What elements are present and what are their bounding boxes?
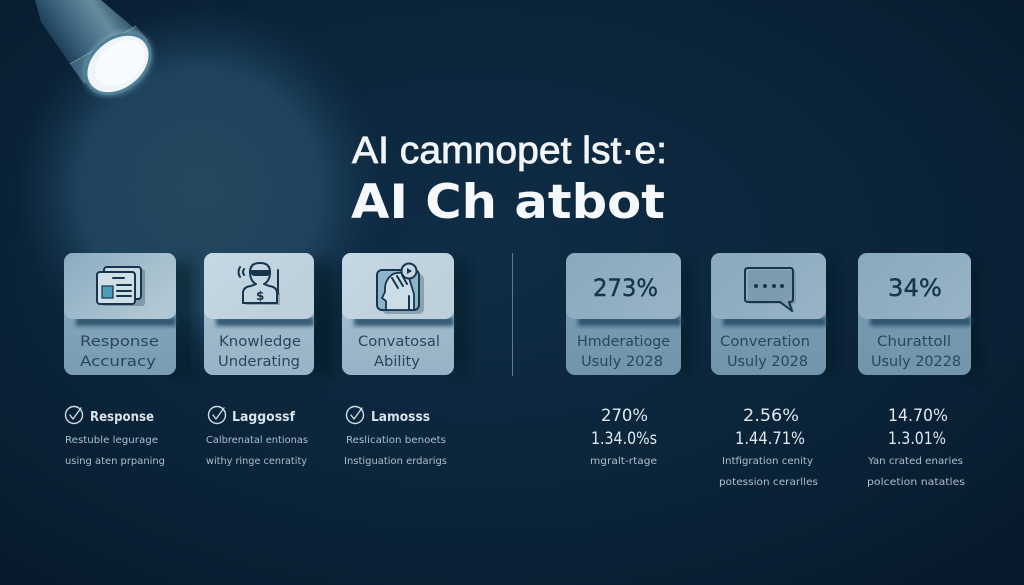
label: Usuly 20228 bbox=[871, 354, 961, 370]
text block: lamosss: Instiguation erdarigs bbox=[344, 456, 447, 467]
panel: conversation card bbox=[711, 253, 838, 375]
label: Accuracy bbox=[80, 354, 156, 370]
text block: lamosss: Lamosss bbox=[371, 410, 430, 425]
label: Underating bbox=[218, 354, 300, 370]
metric: 273% bbox=[593, 274, 658, 302]
text block: laggossf bbox=[206, 406, 308, 467]
text block: response bbox=[65, 406, 165, 467]
text block: laggossf: withy ringe cenratity bbox=[206, 456, 307, 467]
metric: 34% bbox=[888, 274, 942, 302]
text block: laggossf: Laggossf bbox=[232, 410, 295, 425]
label: Convatosal bbox=[358, 334, 440, 350]
stats block: 2.56%: potession cerarlles bbox=[719, 477, 818, 488]
label: Response bbox=[80, 334, 159, 350]
icon: check circle bbox=[66, 406, 82, 424]
panel: knowledge understanding card bbox=[204, 253, 332, 375]
text block: response: Response bbox=[90, 410, 154, 425]
text block: lamosss bbox=[344, 406, 447, 467]
title line 2: AI Ch atbot bbox=[351, 175, 665, 230]
label bbox=[80, 334, 159, 370]
stats block: 2.56% bbox=[719, 406, 818, 488]
stats block: 14.70% bbox=[867, 406, 965, 488]
text block: response: using aten prpaning bbox=[65, 456, 165, 467]
label: Usuly 2028 bbox=[581, 354, 663, 370]
stats block: 2.56%: 2.56% bbox=[743, 406, 799, 426]
title bbox=[351, 130, 667, 230]
icon: check circle bbox=[208, 406, 226, 424]
label bbox=[720, 334, 810, 370]
text block: laggossf: Calbrenatal entionas bbox=[206, 435, 308, 446]
label: Hmderatioge bbox=[577, 334, 670, 350]
stats block: 270%: mgralt-rtage bbox=[590, 456, 657, 467]
stats block: 14.70%: 14.70% bbox=[888, 406, 948, 426]
panel: conversational ability card bbox=[342, 253, 468, 375]
stats block: 270%: 270% bbox=[601, 406, 648, 426]
icon: agent with headset: $ bbox=[256, 289, 264, 303]
panel: 273% card bbox=[566, 253, 693, 375]
stats block: 14.70%: polcetion natatles bbox=[867, 477, 965, 488]
label: Churattoll bbox=[877, 334, 951, 350]
stats block: 2.56%: Intfigration cenity bbox=[722, 456, 813, 467]
title line 1: AI camnopet lst·e: bbox=[352, 130, 667, 172]
label bbox=[871, 334, 961, 370]
label: Ability bbox=[374, 354, 420, 370]
panel: response accuracy card bbox=[64, 253, 192, 375]
label bbox=[218, 334, 301, 370]
label bbox=[358, 334, 440, 370]
spotlight beam bbox=[15, 5, 385, 375]
label bbox=[577, 334, 670, 370]
icon: speech bubble bbox=[745, 268, 796, 313]
label: Knowledge bbox=[219, 334, 301, 350]
stats block: 270%: 1.34.0%s bbox=[591, 429, 657, 449]
panel: 34% card bbox=[858, 253, 981, 375]
stats block: 14.70%: 1.3.01% bbox=[888, 429, 946, 449]
icon: document cards bbox=[97, 267, 145, 306]
label: Converation bbox=[720, 334, 810, 350]
divider bbox=[512, 253, 514, 376]
icon: head with hand bbox=[377, 264, 424, 314]
stats block: 14.70%: Yan crated enaries bbox=[867, 456, 963, 467]
text block: response: Restuble legurage bbox=[65, 435, 158, 446]
label: Usuly 2028 bbox=[727, 354, 808, 370]
icon: check circle bbox=[346, 406, 364, 424]
stats block: 270% bbox=[590, 406, 657, 467]
stats block: 2.56%: 1.44.71% bbox=[735, 429, 805, 449]
text block: lamosss: Reslication benoets bbox=[346, 435, 446, 446]
icon: spotlight lamp bbox=[35, 0, 165, 109]
